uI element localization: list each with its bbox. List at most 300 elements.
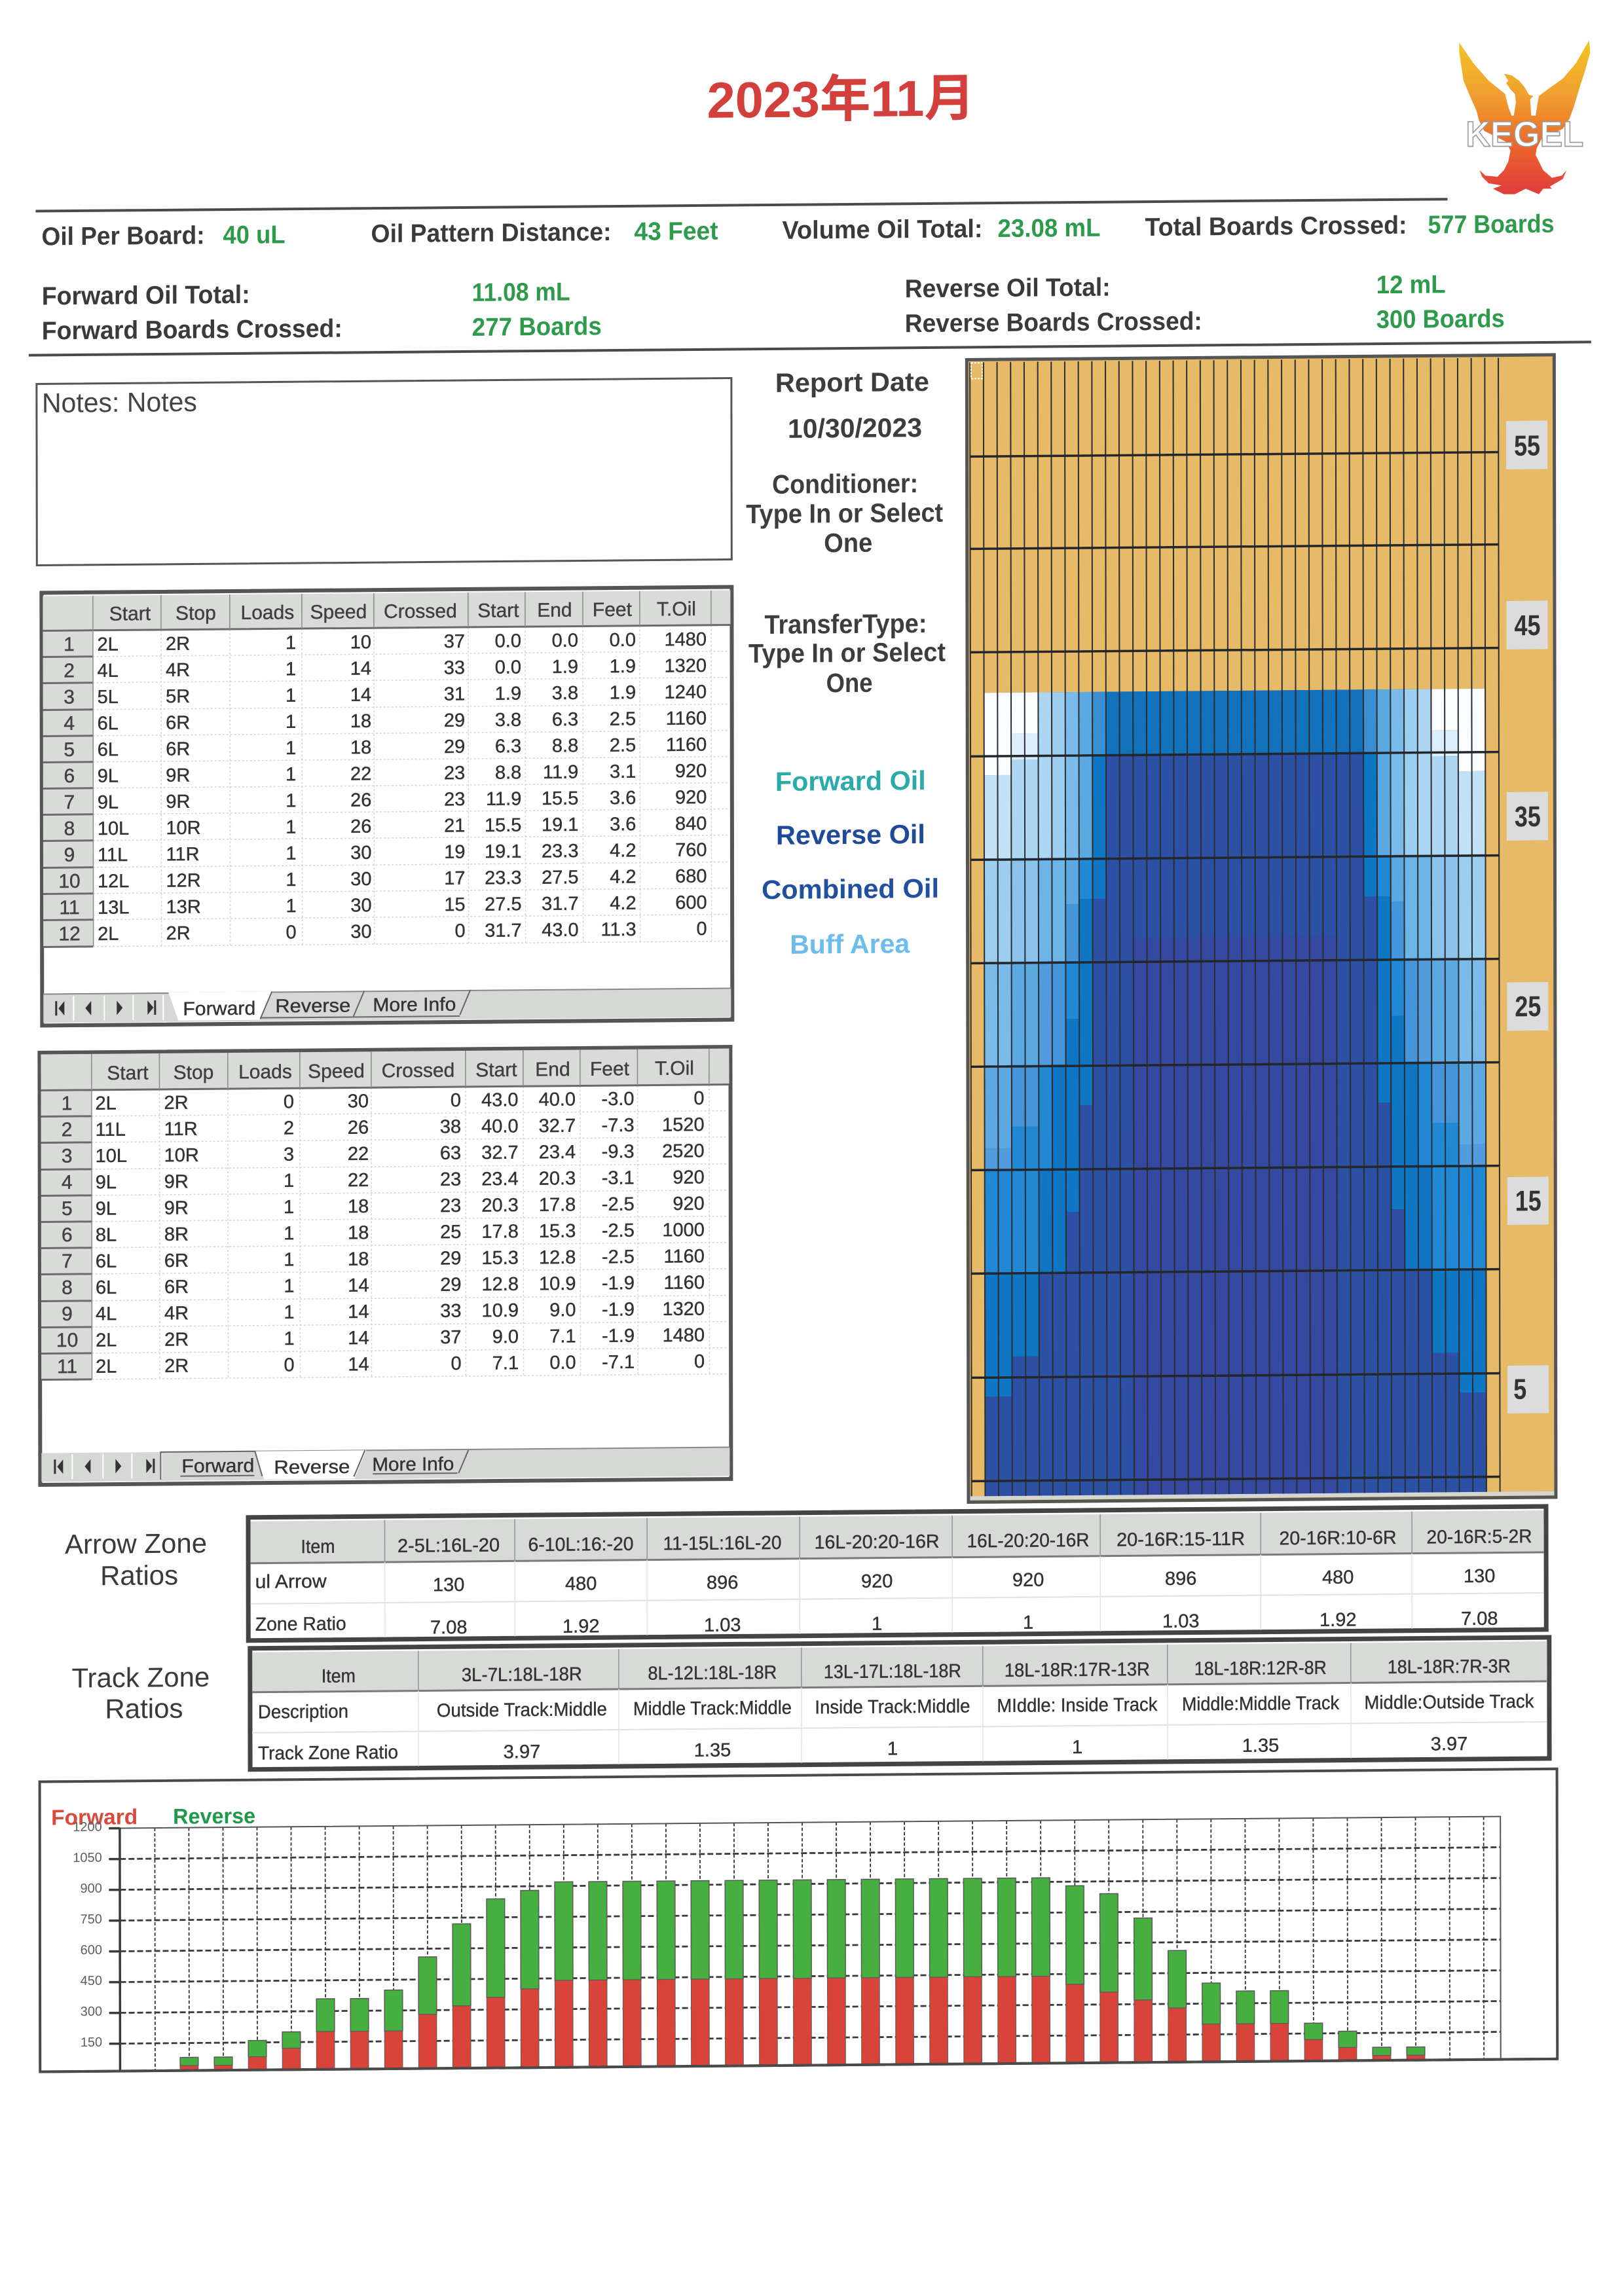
summary row: oil totals: Oil Pattern Distance:	[371, 218, 612, 248]
data rows: 1	[286, 685, 296, 706]
data rows: 1	[286, 817, 296, 838]
data rows: 1	[286, 738, 296, 759]
data rows: 33	[440, 1301, 462, 1322]
data rows: 2L	[96, 1330, 117, 1351]
data rows: 8.8	[495, 762, 521, 784]
header row: Start	[109, 603, 151, 625]
data rows: 37	[444, 631, 465, 652]
data rows: 23.4	[539, 1142, 576, 1163]
header labels: 18L-18R:17R-13R	[1005, 1659, 1150, 1681]
data rows: 9.0	[492, 1326, 519, 1347]
data rows: 2L	[96, 1357, 117, 1377]
data rows: 31.7	[485, 920, 522, 941]
data rows: 4R	[166, 660, 190, 681]
data rows: 0	[451, 1090, 461, 1111]
data rows: 43.0	[542, 920, 579, 941]
data rows: 4L	[96, 1303, 117, 1324]
data rows: 40.0	[481, 1116, 519, 1137]
row: description: Description	[258, 1702, 348, 1723]
data rows: 920	[673, 1167, 705, 1188]
row: track zone ratio: 1	[1072, 1737, 1082, 1758]
data rows: 4R	[164, 1303, 189, 1324]
data rows: 10L	[96, 1146, 127, 1167]
data rows: 3	[62, 1145, 73, 1167]
data rows: 12L	[98, 871, 129, 892]
data rows: 920	[673, 1194, 705, 1214]
data rows: 7.1	[549, 1326, 576, 1347]
summary row: oil totals: 577 Boards	[1428, 210, 1555, 239]
panel: reverse table	[39, 1047, 731, 1485]
row: ul arrow: 480	[565, 1573, 597, 1595]
heading: arrow zone ratios: Ratios	[100, 1559, 178, 1591]
y axis labels: 750	[81, 1912, 102, 1927]
header labels: 16L-20:20-16R	[967, 1530, 1090, 1552]
row: track zone ratio: 1.35	[1242, 1735, 1279, 1757]
data rows: 1.9	[610, 682, 636, 704]
data rows: 38	[440, 1116, 461, 1138]
data rows	[56, 1087, 705, 1377]
data rows: 4.2	[610, 840, 636, 862]
data rows: 0	[284, 1091, 294, 1112]
header row: Crossed	[384, 600, 457, 623]
header labels: Item	[301, 1537, 335, 1558]
heading: arrow zone ratios: Arrow Zone	[65, 1527, 207, 1559]
data rows: 3.1	[610, 761, 636, 782]
data rows: 31.7	[542, 894, 579, 915]
row: zone ratio: 1.92	[563, 1616, 599, 1637]
distance label 25: 25	[1515, 991, 1541, 1023]
row: description: Inside Track:Middle	[815, 1696, 970, 1718]
row: ul arrow: 130	[433, 1575, 464, 1595]
data rows: 4.2	[610, 867, 637, 888]
header row: Speed	[310, 601, 367, 623]
data rows: 30	[350, 895, 372, 916]
data rows: 9L	[96, 1198, 117, 1220]
sheet tab bar: Forward	[181, 1455, 254, 1477]
header row: Feet	[590, 1058, 630, 1080]
distance label 15: 15	[1515, 1185, 1541, 1217]
row: zone ratio: 1	[1023, 1613, 1033, 1633]
data rows: 6.3	[495, 736, 521, 757]
data rows: 29	[444, 710, 465, 731]
data rows: 0	[454, 920, 466, 941]
header row: Start	[107, 1063, 149, 1084]
data rows: 23	[444, 763, 465, 784]
data rows: 43.0	[481, 1089, 519, 1111]
data rows: 0.0	[549, 1353, 576, 1374]
data rows: 9L	[96, 1172, 117, 1193]
report info text: TransferType:	[764, 608, 927, 640]
row: ul arrow: 480	[1322, 1567, 1354, 1588]
header labels: 2-5L:16L-20	[397, 1535, 500, 1557]
data rows: 7	[64, 792, 75, 813]
data rows: 0.0	[610, 630, 636, 651]
data rows: 760	[675, 839, 707, 861]
header row: Loads	[241, 602, 294, 624]
legend: oil colours: Reverse Oil	[776, 819, 925, 850]
data rows: 1160	[664, 1272, 705, 1294]
data rows: 1	[286, 632, 296, 653]
data rows: 0.0	[495, 630, 521, 652]
data rows: 2.5	[610, 708, 636, 730]
data rows: 5	[62, 1198, 73, 1220]
data rows: 22	[348, 1144, 369, 1165]
header labels: 16L-20:20-16R	[815, 1531, 940, 1553]
data rows: 1320	[662, 1298, 705, 1320]
y axis labels: 150	[81, 2035, 102, 2050]
data rows: 3.8	[495, 710, 521, 731]
data rows	[58, 629, 707, 945]
summary row: oil totals: 23.08 mL	[998, 214, 1101, 243]
header row: Feet	[593, 599, 633, 621]
data rows: 15.5	[542, 788, 578, 809]
y axis labels: 900	[80, 1882, 102, 1896]
data rows: 8R	[164, 1224, 189, 1245]
header row: Stop	[174, 1062, 213, 1084]
data rows: 14	[348, 1302, 369, 1322]
header row: End	[535, 1059, 570, 1081]
data rows: -1.9	[602, 1299, 635, 1321]
data rows: 13R	[166, 896, 201, 918]
data rows: 0.0	[552, 630, 578, 651]
row: ul arrow: 920	[1012, 1569, 1044, 1591]
data rows: 8	[64, 818, 75, 840]
data rows: 26	[348, 1117, 369, 1139]
data rows: 920	[675, 787, 707, 808]
data rows: 10R	[164, 1145, 199, 1166]
data rows: -9.3	[602, 1141, 635, 1163]
data rows: 18	[350, 737, 371, 758]
table: arrow zone ratios	[248, 1506, 1546, 1641]
header row: T.Oil	[657, 598, 696, 620]
data rows: 1	[284, 1276, 294, 1297]
data rows: 11.3	[600, 919, 637, 940]
data rows: 1160	[663, 1246, 705, 1267]
data rows: 1	[62, 1093, 72, 1114]
data rows: 30	[350, 843, 371, 864]
data rows: 1320	[665, 655, 707, 677]
row: track zone ratio: 1	[887, 1738, 898, 1760]
data rows: 63	[440, 1142, 461, 1164]
data rows: 15.3	[539, 1221, 576, 1242]
row: track zone ratio: 3.97	[1431, 1734, 1467, 1755]
forward and reverse totals	[42, 270, 1505, 345]
distance label 5	[1507, 1365, 1549, 1413]
data rows: 23	[444, 789, 465, 810]
data rows: 9L	[98, 792, 119, 813]
summary row: oil totals	[42, 210, 1555, 251]
data rows: -1.9	[602, 1326, 635, 1347]
forward and reverse totals: Reverse Oil Total:	[905, 274, 1111, 303]
summary row: oil totals: Total Boards Crossed:	[1145, 211, 1407, 242]
forward and reverse totals: 277 Boards	[472, 312, 602, 342]
data rows: 14	[348, 1354, 369, 1376]
data rows: 8L	[96, 1225, 117, 1246]
sheet tab bar: More Info	[372, 1454, 454, 1476]
y axis labels: 1050	[73, 1851, 102, 1865]
data rows: 1	[286, 896, 297, 917]
data rows: 10	[350, 632, 371, 653]
data rows: 19.1	[542, 814, 578, 835]
data rows: 4.2	[610, 893, 637, 914]
data rows: 11R	[164, 1119, 198, 1140]
row: track zone ratio: Track Zone Ratio	[258, 1742, 398, 1764]
data rows: 18	[348, 1196, 369, 1217]
distance label 45: 45	[1514, 610, 1540, 642]
data rows: -7.1	[602, 1352, 635, 1373]
data rows: -3.0	[602, 1089, 635, 1110]
data rows: 1	[286, 869, 297, 890]
data rows: 6	[62, 1224, 73, 1246]
data rows: 2R	[164, 1093, 189, 1114]
distance label 5: 5	[1513, 1374, 1526, 1406]
data rows: 27.5	[485, 894, 522, 915]
sheet tab bar: Reverse	[274, 1457, 350, 1478]
data rows: 1	[284, 1197, 294, 1218]
data rows: 26	[350, 816, 371, 837]
data rows: 3.8	[552, 683, 578, 704]
data rows: 0	[284, 1355, 295, 1376]
chart grid	[109, 1816, 1501, 2071]
data rows: 4	[64, 713, 75, 735]
data rows: 2	[284, 1118, 294, 1139]
data rows: 21	[444, 815, 465, 837]
data rows: 1	[64, 634, 75, 655]
data rows: 10R	[166, 818, 201, 839]
panel: lane oil graph	[967, 355, 1556, 1502]
data rows: 9R	[166, 792, 190, 812]
data rows: 11L	[96, 1120, 126, 1140]
data rows: 8	[62, 1277, 73, 1299]
data rows: 2R	[164, 1329, 189, 1351]
forward and reverse totals: 12 mL	[1376, 270, 1446, 299]
data rows: 18	[350, 711, 371, 732]
data rows: 11R	[166, 844, 200, 865]
data rows: 1000	[662, 1220, 705, 1241]
header row: End	[537, 600, 572, 621]
data rows: 5L	[98, 687, 119, 708]
data rows: 10.9	[482, 1300, 519, 1321]
data rows: 14	[348, 1328, 369, 1349]
report info text: 10/30/2023	[788, 412, 922, 444]
row: zone ratio: 1.03	[1162, 1611, 1199, 1632]
data rows: -7.3	[602, 1115, 635, 1136]
data rows: 1.9	[495, 683, 521, 704]
row: zone ratio: 7.08	[430, 1617, 467, 1638]
sheet tab bar	[41, 1448, 729, 1482]
sheet tab bar: Forward	[183, 998, 255, 1020]
data rows: 6	[64, 765, 75, 787]
row: zone ratio	[255, 1604, 1498, 1640]
row: zone ratio: 1.92	[1320, 1609, 1356, 1631]
data rows: 6R	[164, 1250, 189, 1271]
row: description	[258, 1691, 1534, 1723]
y axis labels: 450	[81, 1974, 102, 1988]
row: zone ratio: 1.03	[704, 1614, 741, 1636]
data rows: 2	[64, 660, 75, 682]
header labels: 11-15L:16L-20	[663, 1533, 782, 1554]
distance label 15	[1507, 1176, 1549, 1225]
data rows: 23.3	[485, 867, 522, 889]
oil pattern left half	[984, 691, 1236, 1396]
header row: Crossed	[382, 1060, 454, 1082]
data rows: 33	[444, 657, 465, 678]
distance lines	[970, 452, 1500, 1481]
row: description: MIddle: Inside Track	[997, 1694, 1158, 1717]
row: track zone ratio: 3.97	[504, 1741, 540, 1762]
report info text: Type In or Select	[748, 637, 946, 668]
data rows: 1480	[664, 629, 707, 650]
data rows: 0	[694, 1351, 705, 1372]
heading: track zone ratios: Track Zone	[71, 1662, 210, 1694]
data rows: 18	[348, 1222, 369, 1244]
data rows: 3	[64, 686, 75, 708]
distance label 45	[1506, 600, 1548, 649]
data rows: 7	[62, 1250, 73, 1272]
row: zone ratio: 7.08	[1461, 1609, 1498, 1630]
data rows: 5R	[166, 686, 190, 707]
row: ul arrow	[255, 1561, 1495, 1597]
data rows: 37	[440, 1327, 462, 1348]
data rows: 14	[348, 1275, 369, 1296]
data rows: 2R	[164, 1356, 189, 1377]
oil pattern right half (mirror)	[1234, 689, 1486, 1394]
data rows: 23.3	[542, 841, 578, 862]
data rows: 6L	[98, 739, 119, 761]
row: ul arrow: 896	[707, 1572, 738, 1594]
data rows: 29	[440, 1274, 461, 1296]
row: description: Middle:Outside Track	[1364, 1691, 1534, 1713]
heading: track zone ratios: Ratios	[105, 1693, 183, 1724]
data rows: 3	[284, 1144, 294, 1165]
data rows: 1	[286, 659, 296, 680]
data rows: 2L	[97, 634, 119, 655]
forward and reverse totals: 11.08 mL	[472, 278, 570, 307]
data rows: 17	[444, 868, 466, 889]
legend: oil colours: Combined Oil	[762, 873, 939, 905]
data rows: 40.0	[539, 1089, 576, 1110]
title: 2023年11月	[707, 70, 975, 129]
data rows: 12	[58, 923, 81, 945]
heading: track zone ratios	[71, 1662, 210, 1724]
data rows: -2.5	[602, 1220, 635, 1241]
data rows: 20.3	[539, 1168, 576, 1190]
data rows: 23.4	[481, 1169, 519, 1190]
data rows: 6R	[164, 1277, 189, 1298]
reverse oil bars	[180, 1874, 1425, 2066]
data rows: 11.9	[486, 788, 521, 810]
header labels: Item	[322, 1666, 356, 1687]
data rows: 27.5	[542, 867, 579, 888]
data rows: 30	[350, 921, 372, 943]
row: track zone ratio	[258, 1733, 1467, 1765]
data rows: 31	[444, 683, 465, 705]
data rows: 1160	[666, 735, 707, 756]
data rows: 13L	[98, 897, 129, 919]
data rows: 2R	[166, 923, 191, 944]
report info text: Type In or Select	[746, 498, 944, 529]
distance label 55: 55	[1514, 430, 1540, 462]
data rows: 2520	[662, 1140, 705, 1162]
row: ul arrow: 896	[1165, 1568, 1196, 1590]
sheet tab bar: Reverse	[275, 995, 350, 1017]
data rows: 9R	[166, 765, 190, 786]
forward and reverse totals: Reverse Boards Crossed:	[905, 307, 1202, 338]
forward and reverse totals: Forward Oil Total:	[42, 281, 250, 310]
data rows: 29	[444, 737, 465, 757]
data rows: 9R	[164, 1197, 189, 1219]
header labels: 3L-7L:18L-18R	[462, 1664, 582, 1686]
summary row: oil totals: 43 Feet	[635, 217, 718, 246]
data rows: 11.9	[543, 762, 578, 783]
table: track zone ratios	[250, 1637, 1549, 1770]
data rows: 7.1	[492, 1353, 519, 1374]
header row: Stop	[175, 602, 216, 625]
header row: Start	[477, 600, 519, 622]
row: description: Middle:Middle Track	[1182, 1693, 1339, 1715]
data rows: 17.8	[481, 1221, 519, 1243]
data rows: 6L	[98, 713, 119, 734]
header labels: 8L-12L:18L-18R	[648, 1662, 777, 1685]
second rule	[29, 340, 1591, 357]
data rows: 3.6	[610, 814, 636, 835]
data rows: 1240	[665, 682, 707, 703]
panel: oil distribution bar chart	[40, 1769, 1557, 2073]
data rows: 19.1	[485, 841, 521, 862]
top rule	[35, 198, 1447, 213]
data rows: 30	[348, 1091, 369, 1112]
board lines	[970, 358, 1500, 1496]
distance label 55	[1506, 420, 1547, 469]
y axis labels: 300	[81, 2005, 102, 2019]
data rows: 0.0	[495, 657, 521, 678]
data rows: 4L	[98, 661, 119, 682]
header labels: 20-16R:5-2R	[1427, 1526, 1532, 1548]
oil pattern base	[984, 689, 1486, 1496]
data rows: 14	[350, 685, 371, 706]
icon: Kegel phoenix logo: KEGEL	[1466, 113, 1583, 154]
oil pattern darkest centre	[1134, 936, 1337, 1495]
header labels: 20-16R:15-11R	[1116, 1529, 1245, 1551]
y axis labels: 1200	[73, 1820, 102, 1834]
sheet tab bar: More Info	[373, 994, 456, 1016]
header row: Speed	[308, 1061, 365, 1083]
header labels	[301, 1526, 1532, 1558]
legend: oil colours	[762, 765, 939, 960]
data rows: 1	[284, 1328, 295, 1349]
data rows: 1	[286, 790, 296, 812]
forward and reverse totals: Forward Boards Crossed:	[42, 315, 342, 345]
summary row: oil totals: 40 uL	[223, 221, 286, 249]
data rows: 20.3	[481, 1195, 519, 1216]
data rows: 1160	[666, 708, 707, 729]
data rows: -1.9	[602, 1273, 635, 1294]
data rows: 11	[59, 897, 80, 919]
data rows: 15.3	[481, 1247, 519, 1269]
row: ul arrow: ul Arrow	[255, 1571, 327, 1593]
forward oil bars	[180, 1973, 1425, 2071]
data rows: 1	[284, 1302, 295, 1323]
data rows: 22	[350, 763, 371, 784]
data rows: 6.3	[552, 709, 578, 730]
data rows: 6R	[166, 712, 190, 733]
data rows: 0	[286, 922, 297, 943]
data rows: 23	[440, 1195, 461, 1216]
data rows: 10	[56, 1330, 78, 1351]
distance label 35	[1507, 792, 1548, 841]
report info text: Conditioner:	[772, 468, 918, 500]
header labels: 18L-18R:7R-3R	[1388, 1656, 1511, 1678]
